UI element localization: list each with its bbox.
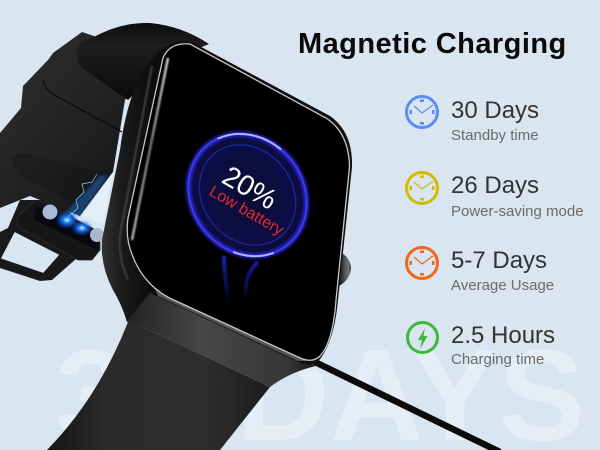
blue glow over strap	[64, 176, 108, 216]
lower watch band	[47, 322, 270, 450]
contact pin left	[42, 204, 58, 220]
spark glow right	[71, 220, 93, 236]
bezel outer reflection	[120, 66, 152, 280]
left glossy streak	[132, 58, 168, 240]
stat: 5-7 days average usage	[406, 247, 554, 294]
watch body	[102, 41, 352, 365]
watch lug	[127, 292, 316, 387]
battery percent: 20%	[217, 160, 282, 216]
upper watch band	[77, 23, 209, 100]
caption: Power-saving mode	[451, 203, 584, 220]
ring highlights	[164, 110, 331, 280]
value: 26 Days	[451, 172, 539, 199]
caption: Average Usage	[451, 277, 554, 294]
inner ring	[179, 126, 316, 264]
caption: Standby time	[451, 127, 539, 144]
stat: 2.5 hours charging	[408, 322, 555, 368]
caption: Charging time	[451, 351, 544, 368]
icon: yellow clock	[406, 172, 438, 204]
blue energy streams	[224, 256, 258, 312]
ring glow	[164, 110, 331, 280]
light gap behind sparks	[80, 172, 113, 224]
stat: 26 days power saving	[406, 172, 584, 220]
value: 2.5 Hours	[451, 322, 555, 349]
icon: orange clock	[406, 248, 438, 278]
buckle opening	[2, 233, 58, 272]
connector body	[17, 201, 100, 260]
stat: 30 days standby	[406, 96, 539, 144]
contact pin right	[90, 228, 104, 242]
rear strap	[0, 32, 170, 216]
bottom lip reflection	[153, 285, 306, 361]
back strap and buckle	[0, 32, 170, 281]
gloss blue-black face	[34, 206, 100, 250]
low battery label: Low battery	[206, 183, 286, 239]
outer bright ring	[164, 110, 331, 280]
crown button	[339, 252, 351, 286]
buckle frame	[0, 200, 100, 281]
strap inner panel	[12, 153, 100, 205]
watch screen	[127, 44, 350, 360]
value: 5-7 Days	[451, 247, 547, 274]
spark glow left	[55, 211, 79, 229]
lightning lines	[68, 174, 97, 217]
strap edge lines	[43, 80, 122, 132]
icon: green bolt	[408, 322, 438, 352]
charging cable	[315, 362, 500, 450]
value: 30 Days	[451, 97, 539, 124]
charging ring display	[164, 110, 331, 312]
title: Magnetic Charging	[298, 28, 567, 60]
icon: blue clock	[406, 96, 438, 128]
magnetic charging connector	[17, 172, 113, 260]
